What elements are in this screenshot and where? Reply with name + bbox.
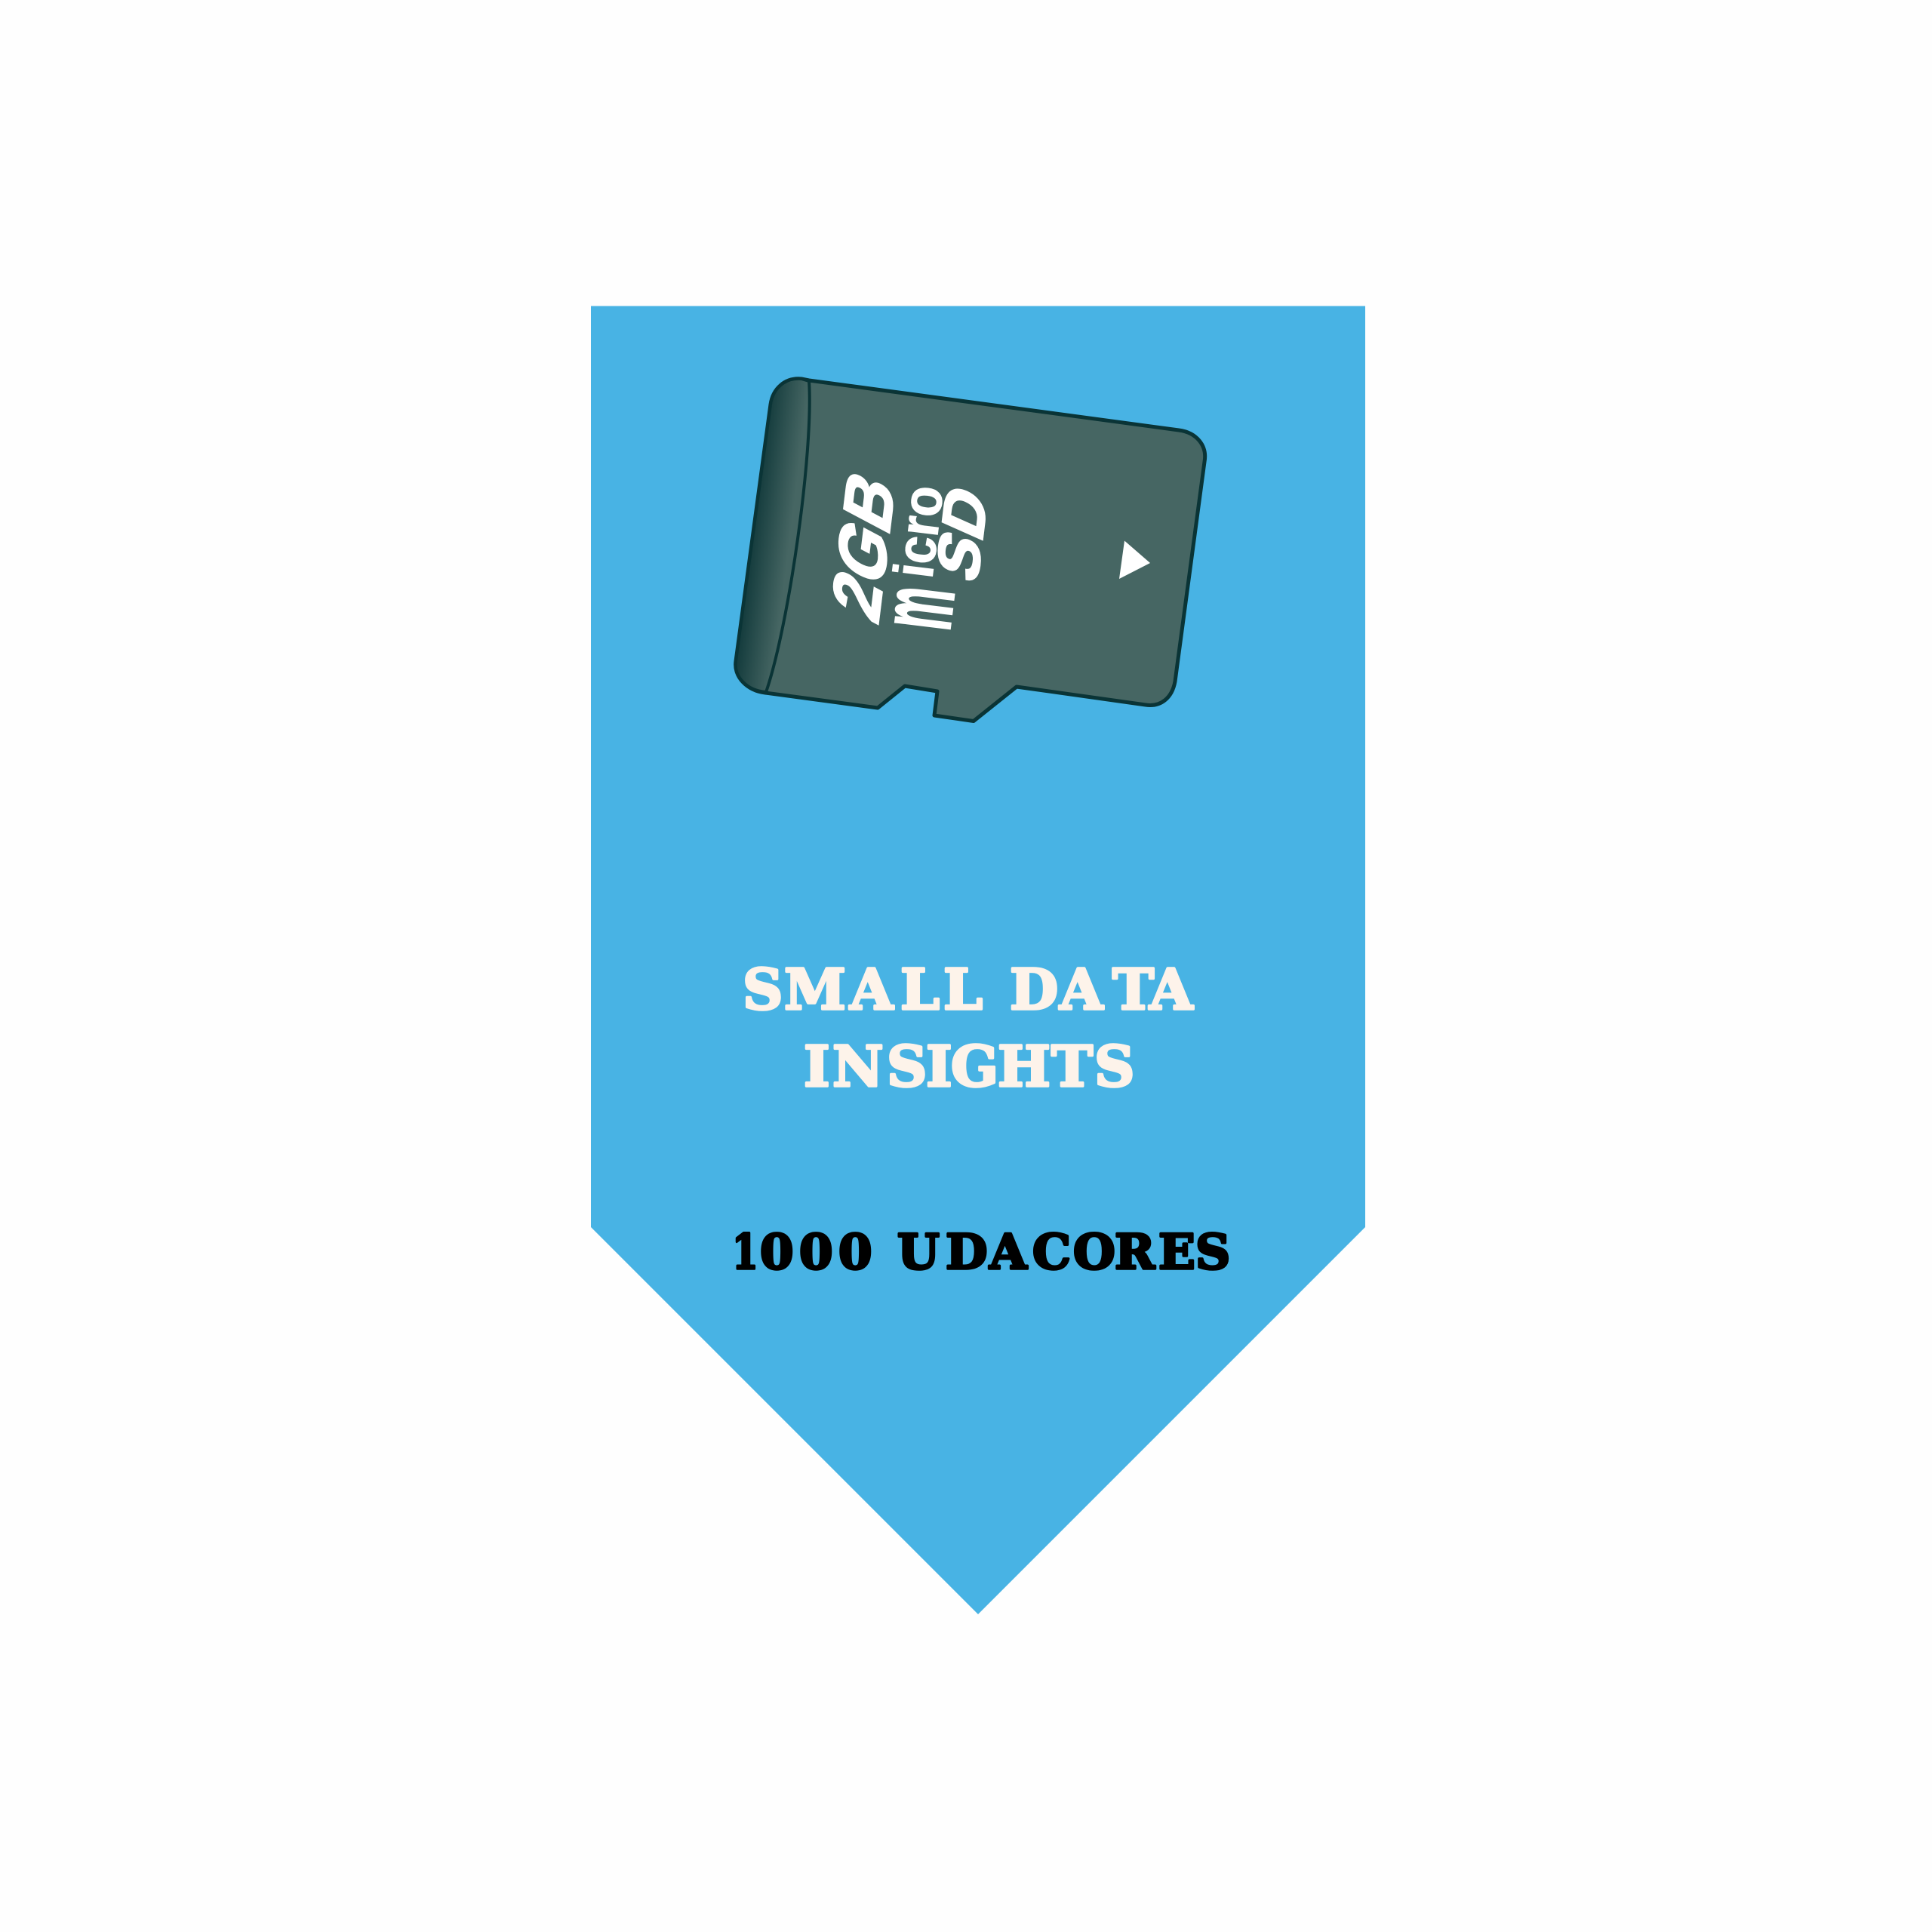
title: small data insights: [743, 958, 1194, 1100]
title word: insights: INSIGHTS: [804, 1035, 1134, 1100]
score number: zeros: 000: [760, 1224, 872, 1281]
card shaded left edge: [736, 379, 810, 692]
title word: small: SMALL: [743, 958, 983, 1023]
score number: narrowed leading digit: 1: [732, 1223, 758, 1281]
title word: data: DATA: [1010, 958, 1194, 1023]
card body: [736, 379, 1205, 721]
score label: 1000 udacores: [732, 1223, 1230, 1281]
card label: micro, tall m: m: [856, 580, 977, 635]
card label: 2GB: 2GB: [818, 457, 909, 634]
icon: micro SD card: [736, 379, 1205, 721]
score unit: UDACORES: [897, 1224, 1230, 1281]
card label: SD: SD: [924, 475, 1000, 591]
pennant badge background: [591, 306, 1365, 1614]
icon: insertion arrow: [1119, 540, 1150, 579]
card label: micro, remaining letters: icro: [881, 482, 955, 581]
